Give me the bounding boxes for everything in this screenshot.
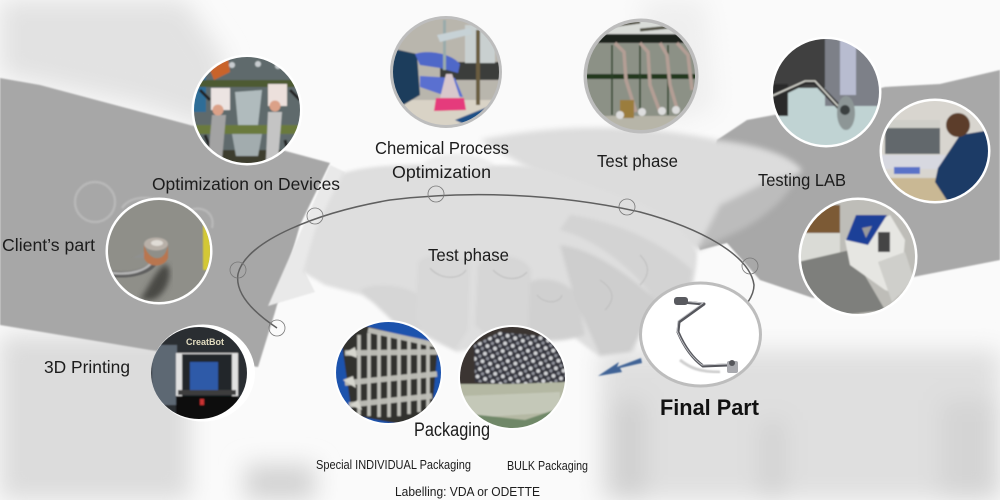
- photo: test phase rack: [584, 18, 699, 134]
- left white cuff: [268, 165, 345, 306]
- label: labelling standards: Labelling: VDA or ODETTE: [395, 484, 540, 499]
- label: testing lab: Testing LAB: [758, 170, 846, 190]
- label: optimization on devices: Optimization on Devices: [152, 174, 340, 194]
- left hand with fingers: [303, 154, 697, 357]
- arrow: final part to packaging: [598, 358, 642, 376]
- label: special individual packaging: Special INDIVIDUAL Packaging: [316, 457, 471, 472]
- photo: client's part: [105, 198, 213, 304]
- label: bulk packaging: BULK Packaging: [507, 458, 588, 473]
- label: test phase centre: Test phase: [428, 245, 509, 265]
- right hand upper: [480, 128, 802, 250]
- label: packaging: Packaging: [414, 420, 490, 441]
- photo: optimization on devices: [190, 54, 305, 166]
- photo: chemical process optimization: [390, 15, 502, 130]
- label: final part: Final Part: [660, 395, 760, 420]
- sleeve buttons: [75, 182, 213, 228]
- process arc with node markers: [230, 186, 758, 336]
- right sleeve: [690, 70, 1000, 298]
- icon: final part end fittings: [674, 297, 738, 373]
- label: chemical process optimization: [375, 138, 509, 182]
- photo: 3D printer: [150, 324, 255, 422]
- label: test phase upper: Test phase: [597, 151, 678, 171]
- photo: testing lab technician: [880, 96, 990, 206]
- photo: 3D printer: CreatBot: [186, 337, 224, 347]
- left sleeve: [0, 78, 330, 367]
- photo: individual packaging: [336, 320, 441, 423]
- label: chemical process optimization: Optimization: [392, 162, 491, 182]
- label: 3D printing: 3D Printing: [44, 357, 130, 377]
- photo: testing lab chamber: [798, 197, 918, 320]
- photo: bulk packaging: [460, 325, 565, 428]
- label: chemical process optimization: Chemical Process: [375, 138, 509, 158]
- photo: final part: [639, 282, 762, 388]
- label: client's part: Client’s part: [2, 235, 95, 255]
- photo: testing lab part under laser: [770, 36, 882, 148]
